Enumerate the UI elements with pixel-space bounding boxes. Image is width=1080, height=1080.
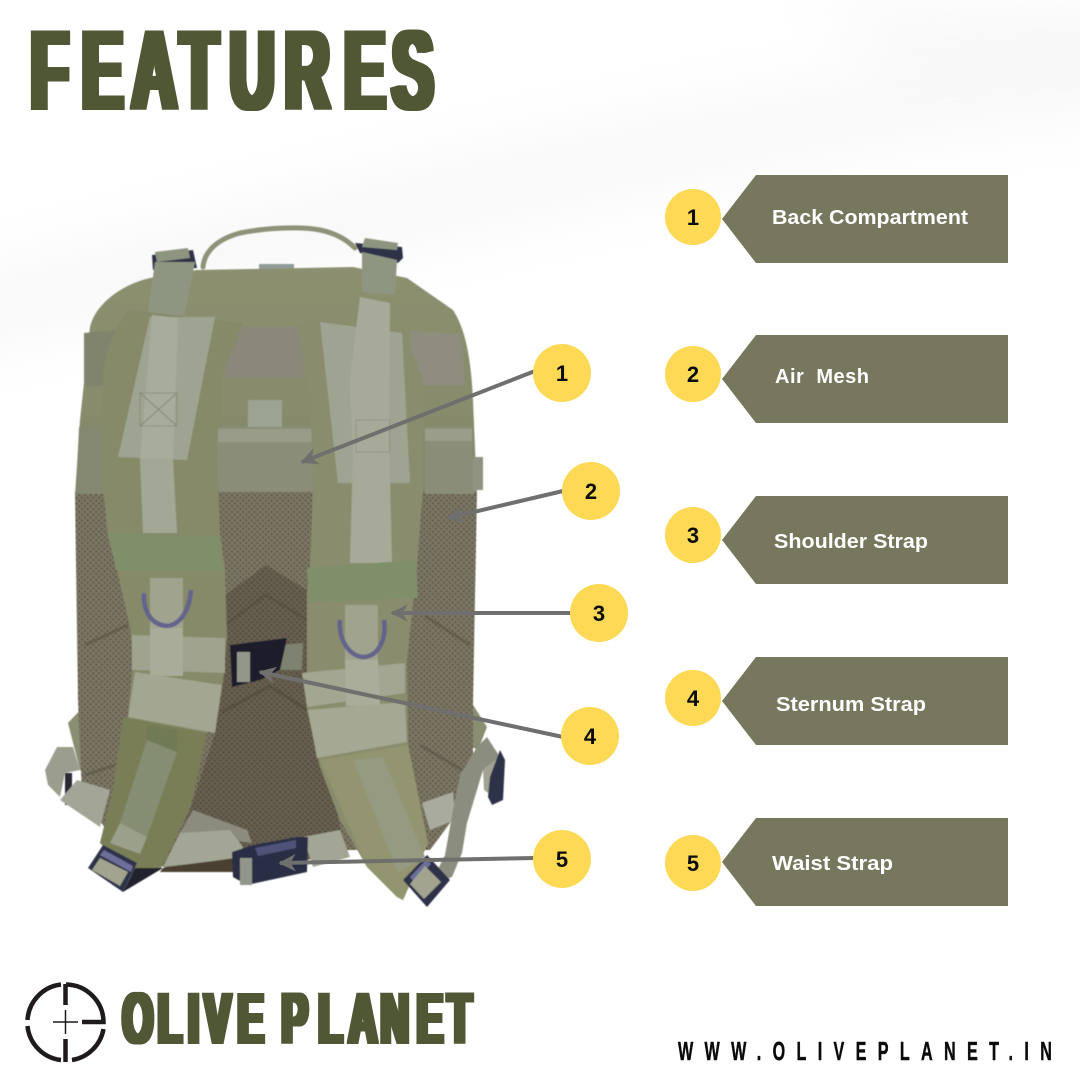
- marker 4 on backpack: 4: [584, 724, 597, 749]
- main body: [75, 267, 477, 495]
- marker 1 on backpack: [533, 344, 591, 402]
- website: WWW.OLIVEPLANET.IN: [678, 1036, 1052, 1066]
- sternum strap and buckle: [280, 643, 303, 670]
- right adjuster webbing: [353, 757, 425, 873]
- right shoulder strap pad: [297, 320, 428, 900]
- upper webbing bands: [84, 330, 117, 387]
- legend item 3: [665, 496, 1008, 584]
- arrow 2: [448, 491, 563, 518]
- left lower strap loops: [132, 635, 225, 673]
- legend item 4: [665, 657, 1008, 745]
- logo wordmark: OLIVE PLANET: [123, 980, 472, 1059]
- top compression straps and buckles: [152, 250, 197, 270]
- left shoulder webbing: [118, 317, 215, 460]
- marker 3 on backpack: 3: [593, 601, 605, 626]
- carry handle: [203, 228, 355, 267]
- left adjuster webbing: [120, 740, 177, 837]
- marker 5 on backpack: [533, 830, 591, 888]
- marker 4 on backpack: [561, 707, 619, 765]
- arrow 5: [280, 858, 535, 863]
- right lower strap loops: [302, 663, 405, 707]
- legend item 2: [665, 335, 1008, 423]
- legend item 4: 4: [687, 686, 700, 711]
- backpack illustration: [45, 228, 505, 907]
- left D-ring: [150, 578, 183, 628]
- left shoulder strap pad: [100, 310, 243, 880]
- legend item 3: 3: [687, 523, 699, 548]
- marker 2 on backpack: 2: [585, 479, 597, 504]
- legend item 3: Shoulder Strap: [774, 531, 928, 553]
- marker 3 on backpack: [570, 584, 628, 642]
- title: FEATURES: [31, 9, 433, 134]
- legend item 2: 2: [687, 362, 699, 387]
- legend item 1: 1: [687, 205, 699, 230]
- legend item 1: [665, 175, 1008, 263]
- right waist wing: [430, 737, 500, 885]
- marker 1 on backpack: 1: [556, 361, 568, 386]
- marker 2 on backpack: [562, 462, 620, 520]
- lower webbing bands: [76, 427, 106, 494]
- velcro patches: [109, 533, 222, 570]
- legend item 1: Back Compartment: [772, 207, 968, 229]
- waist buckle: [232, 837, 308, 885]
- right ladder buckle: [403, 855, 450, 907]
- mesh back panel: [75, 492, 477, 868]
- arrow 1: [302, 371, 535, 462]
- waist belt strap: [180, 810, 252, 843]
- arrow 4: [260, 672, 563, 737]
- left ladder buckle: [88, 845, 137, 892]
- arrow 3: [392, 611, 571, 615]
- side tab: [473, 457, 483, 490]
- legend item 2: Air Mesh: [775, 366, 869, 388]
- left waist wing: [45, 747, 80, 797]
- legend item 5: 5: [687, 851, 699, 876]
- marker 5 on backpack: 5: [556, 847, 568, 872]
- storage tab: [248, 400, 282, 427]
- logo crosshair icon: [28, 984, 104, 1062]
- hip pad slivers: [68, 708, 90, 775]
- legend item 4: Sternum Strap: [776, 694, 926, 716]
- legend item 5: [665, 818, 1008, 906]
- legend item 5: Waist Strap: [772, 853, 893, 875]
- right shoulder webbing: [320, 322, 410, 483]
- right D-ring: [345, 605, 378, 661]
